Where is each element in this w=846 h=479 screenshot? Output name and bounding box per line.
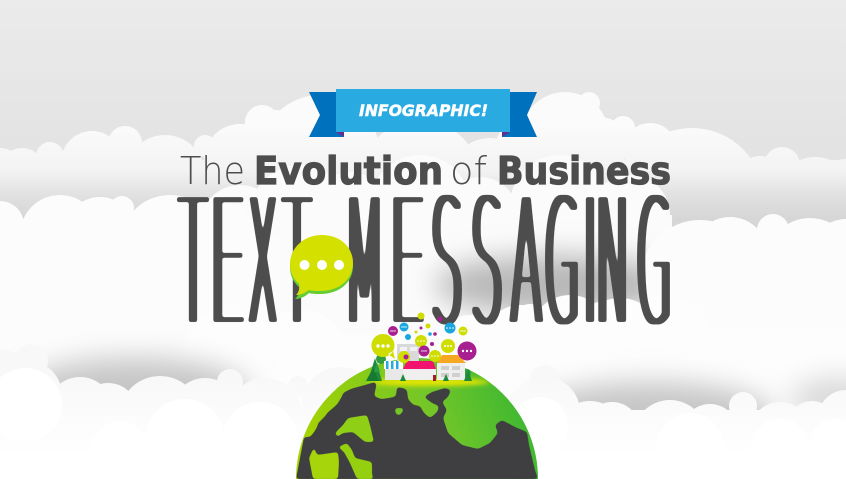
title line two: S [471, 163, 503, 365]
title line two: T [179, 163, 207, 365]
bubble dots [300, 260, 344, 270]
island two [309, 447, 339, 479]
lower left cloud shadow [20, 358, 250, 426]
hydrant [433, 375, 436, 381]
ribbon left tail [309, 92, 344, 137]
shop left striped awning [384, 361, 403, 369]
trees left [366, 358, 382, 381]
shop left [385, 368, 403, 380]
title line two: A [511, 163, 542, 365]
lower white cloud foreground [0, 368, 846, 479]
illustration: small town [366, 312, 476, 381]
title line two: S [431, 163, 463, 365]
lime bubbles [398, 312, 468, 363]
ribbon right tail [502, 92, 537, 137]
title line two: E [389, 163, 426, 365]
shop right orange roof [437, 355, 466, 363]
ribbon centre panel [336, 89, 510, 132]
island one [335, 415, 374, 442]
blue bubbles [400, 322, 456, 340]
island three [338, 443, 374, 479]
title line one: of [450, 149, 488, 193]
globe sphere [296, 358, 538, 479]
island four [395, 408, 403, 415]
ribbon folds [336, 132, 510, 137]
large lime bubble [371, 334, 395, 359]
left and right white cloud layers [0, 195, 846, 425]
purple bubbles [388, 316, 476, 360]
shop centre pink roof [403, 361, 436, 369]
central white cloud behind title [200, 155, 672, 345]
bubble shadow [290, 238, 353, 299]
title line two: M [345, 163, 384, 365]
lower right cloud shadow [525, 382, 775, 450]
title line two: E [209, 163, 246, 365]
title line two: N [596, 163, 630, 365]
dark landmass [296, 382, 538, 479]
chat bubbles [371, 312, 476, 363]
tree cluster behind buildings [376, 354, 471, 377]
title line two: X [248, 163, 277, 365]
bubble body [290, 235, 353, 295]
illustration: globe [296, 358, 538, 479]
shop right [437, 363, 465, 380]
title line one: The [180, 149, 245, 193]
title line two: G [636, 163, 672, 365]
title line two: I [583, 163, 597, 365]
globe top highlight [370, 378, 490, 386]
green islands [309, 408, 404, 479]
lower cloud layer [0, 344, 846, 479]
icon: speech bubble [290, 235, 353, 299]
shop right windows [441, 366, 460, 377]
shop centre [403, 369, 436, 380]
title line two: T [283, 163, 311, 365]
ribbon label: INFOGRAPHIC! [359, 101, 488, 120]
ribbon banner [309, 89, 537, 137]
bubble dots [390, 326, 472, 357]
back building windows [400, 347, 417, 351]
title line one: Business [497, 149, 671, 193]
small trees front [400, 369, 472, 381]
title line two: G [544, 163, 580, 365]
title line two [179, 163, 672, 365]
soft shadow behind MESSAGING [435, 255, 675, 315]
title line one: Evolution [254, 149, 443, 193]
lower far right cloud shadow [790, 378, 846, 422]
cloud tops under the title [180, 295, 846, 425]
back building [397, 344, 419, 362]
upper cloud layer [0, 92, 846, 272]
